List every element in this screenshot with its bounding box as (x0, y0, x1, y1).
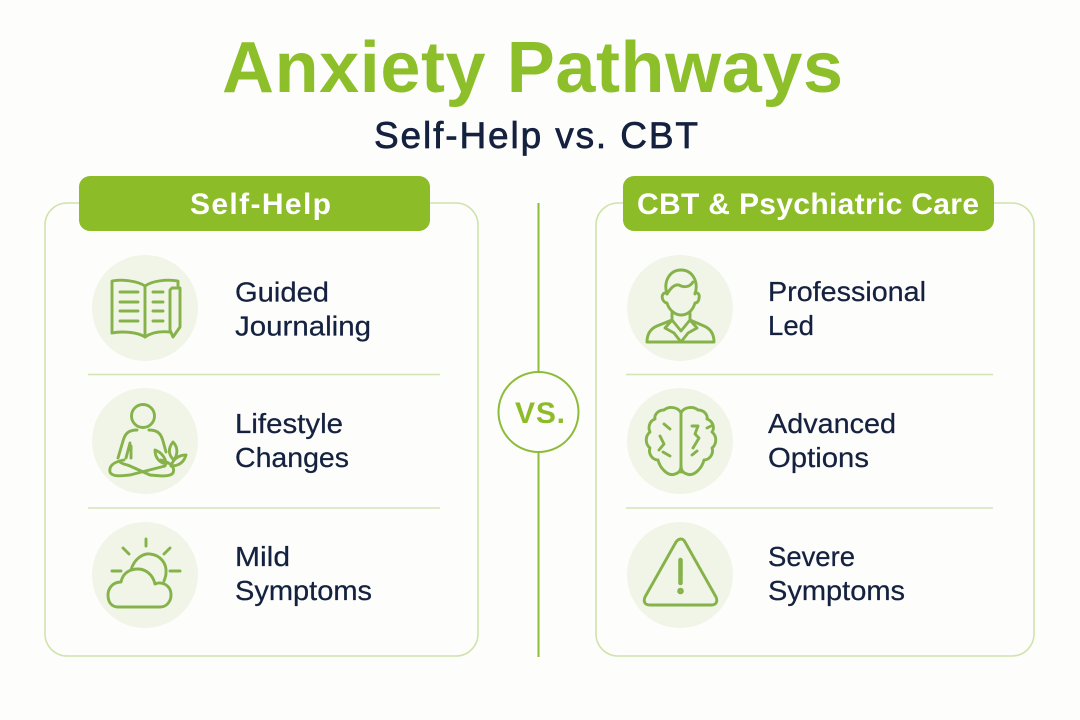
text: severe symptoms: Symptoms (768, 575, 905, 606)
vs divider: VS. (515, 397, 565, 430)
text: advanced options (768, 408, 896, 473)
panel outline: cbt (596, 203, 1034, 656)
header: cbt (623, 176, 994, 231)
header: self-help: Self-Help (190, 188, 331, 221)
panel: self-help (45, 176, 478, 656)
icon: brain (627, 388, 733, 494)
icon: warning triangle (627, 522, 733, 628)
text: guided journaling (235, 276, 371, 342)
icon: sun behind cloud (92, 522, 198, 628)
text: lifestyle changes: Changes (235, 442, 349, 473)
panel: cbt and psychiatric care (596, 176, 1034, 656)
text: advanced options: Advanced (768, 408, 896, 439)
text: lifestyle changes (235, 408, 349, 473)
icon: open book and pen (92, 255, 198, 361)
text: advanced options: Options (768, 442, 869, 473)
text: guided journaling: Guided (235, 276, 329, 308)
header: self-help (79, 176, 430, 231)
text: professional led: Led (768, 310, 814, 341)
text: severe symptoms (768, 541, 905, 606)
text: severe symptoms: Severe (768, 541, 855, 572)
panel outline: self-help (45, 203, 478, 656)
text: professional led (768, 276, 926, 341)
text: mild symptoms (235, 541, 372, 606)
vs divider (498, 203, 578, 657)
text: lifestyle changes: Lifestyle (235, 408, 343, 439)
icon: professional person (627, 255, 733, 361)
text: professional led: Professional (768, 276, 926, 307)
text: mild symptoms: Mild (235, 541, 290, 572)
header: cbt: CBT & Psychiatric Care (637, 188, 979, 221)
text: guided journaling: Journaling (235, 310, 371, 342)
subtitle: Self-Help vs. CBT (374, 115, 698, 156)
icon: meditating person with leaves (92, 388, 198, 494)
title: Anxiety Pathways (222, 28, 843, 108)
text: mild symptoms: Symptoms (235, 575, 372, 606)
